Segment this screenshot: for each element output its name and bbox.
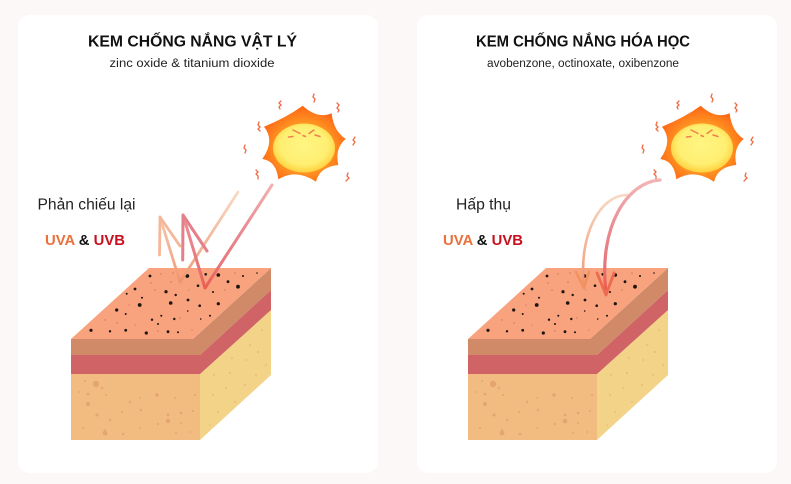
title: chemical sunscreen: KEM CHỐNG NẮNG HÓA HỌC — [476, 32, 690, 50]
label: absorbed: Hấp thụ — [456, 196, 511, 214]
panel: chemical sunscreen — [417, 15, 777, 473]
arrow: UVB absorbed — [597, 180, 660, 295]
title: physical sunscreen: KEM CHỐNG NẮNG VẬT LÝ — [88, 32, 298, 50]
panel: physical sunscreen — [18, 15, 378, 473]
subtitle: physical ingredients: zinc oxide & titanium dioxide — [110, 58, 274, 70]
label: UVA and UVB: UVA & UVB — [45, 232, 125, 249]
icon: sun — [244, 94, 355, 182]
arrow: UVB reflected — [183, 185, 272, 288]
label: UVA and UVB: UVA & UVB — [443, 232, 523, 249]
subtitle: chemical ingredients: avobenzone, octinoxate, oxibenzone — [487, 58, 679, 70]
illustration: skin layers — [468, 268, 668, 440]
label: reflected: Phản chiếu lại — [38, 196, 136, 214]
arrow: UVA reflected — [160, 192, 238, 282]
arrow: UVA absorbed — [576, 195, 627, 288]
icon: sun — [642, 94, 753, 182]
illustration: skin layers — [71, 268, 271, 440]
